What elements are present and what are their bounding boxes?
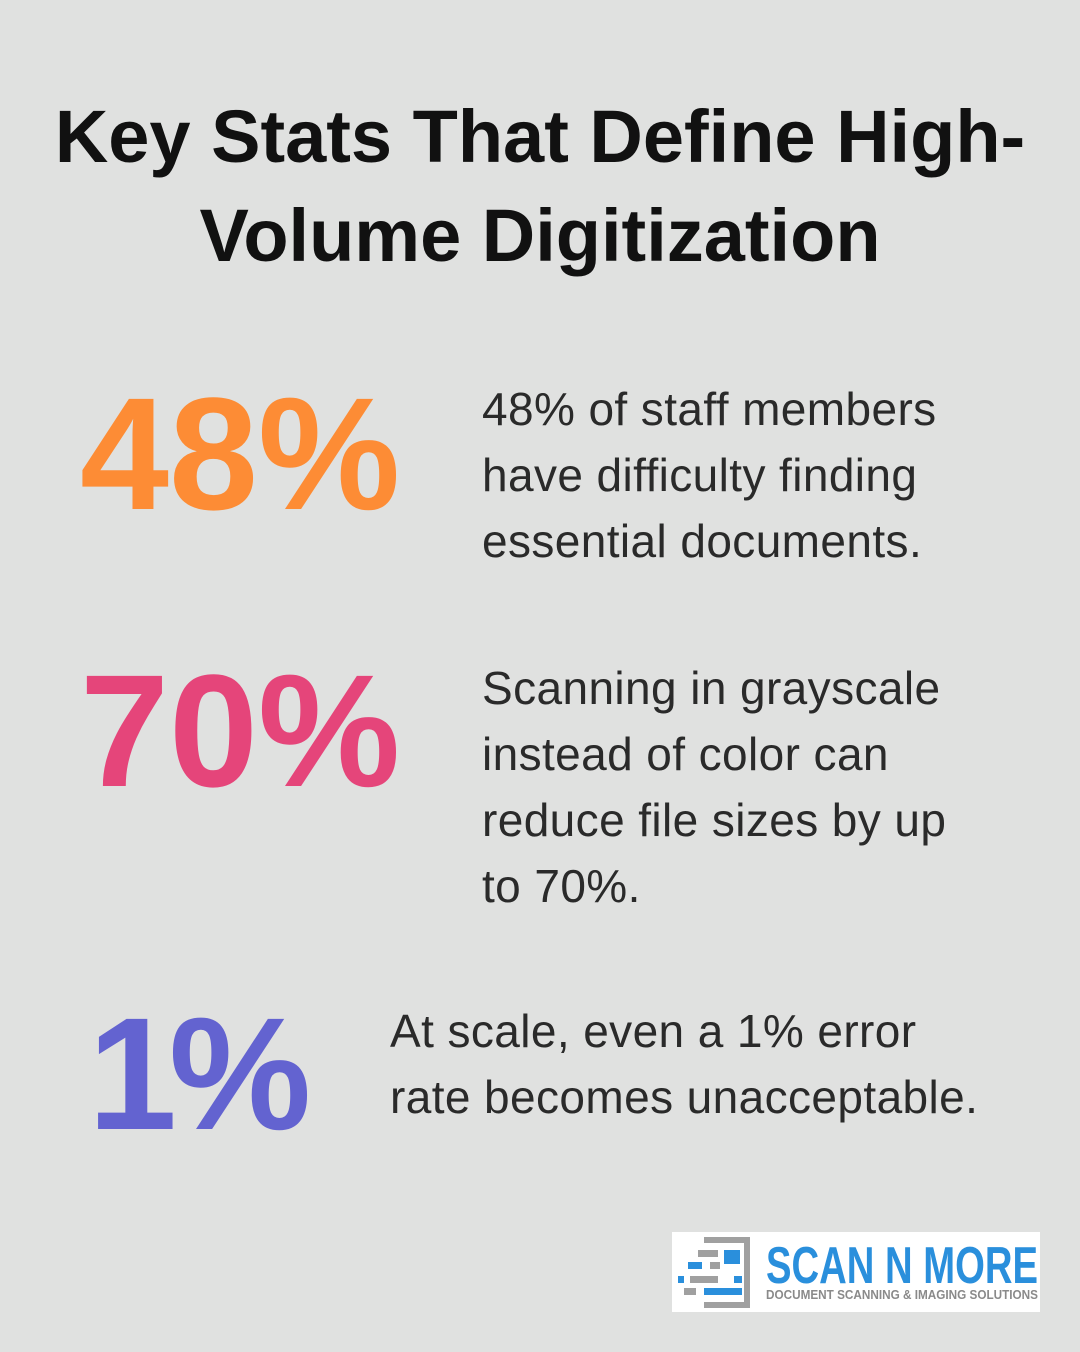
title: Volume Digitization [199, 194, 881, 277]
text: 70% description [482, 662, 946, 912]
text: 48% description: have difficulty finding [482, 449, 917, 501]
text: 48% description: 48% of staff members [482, 383, 937, 435]
stat: 70%: 70% [80, 641, 400, 820]
logo [672, 1232, 1040, 1312]
text: 48% description [482, 383, 937, 567]
text: 48% description: essential documents. [482, 515, 922, 567]
text: 70% description: instead of color can [482, 728, 889, 780]
text: 70% description: reduce file sizes by up [482, 794, 946, 846]
title [55, 95, 1025, 277]
text: 70% description: to 70%. [482, 860, 641, 912]
text: 1% description: At scale, even a 1% error [390, 1005, 916, 1057]
text: 1% description: rate becomes unacceptable. [390, 1071, 978, 1123]
text: 1% description [390, 1005, 978, 1123]
stat: 48%: 48% [80, 364, 400, 543]
text: 70% description: Scanning in grayscale [482, 662, 940, 714]
stat: 1%: 1% [88, 984, 303, 1163]
icon: scanner [678, 1237, 750, 1308]
title: Key Stats That Define High- [55, 95, 1025, 178]
